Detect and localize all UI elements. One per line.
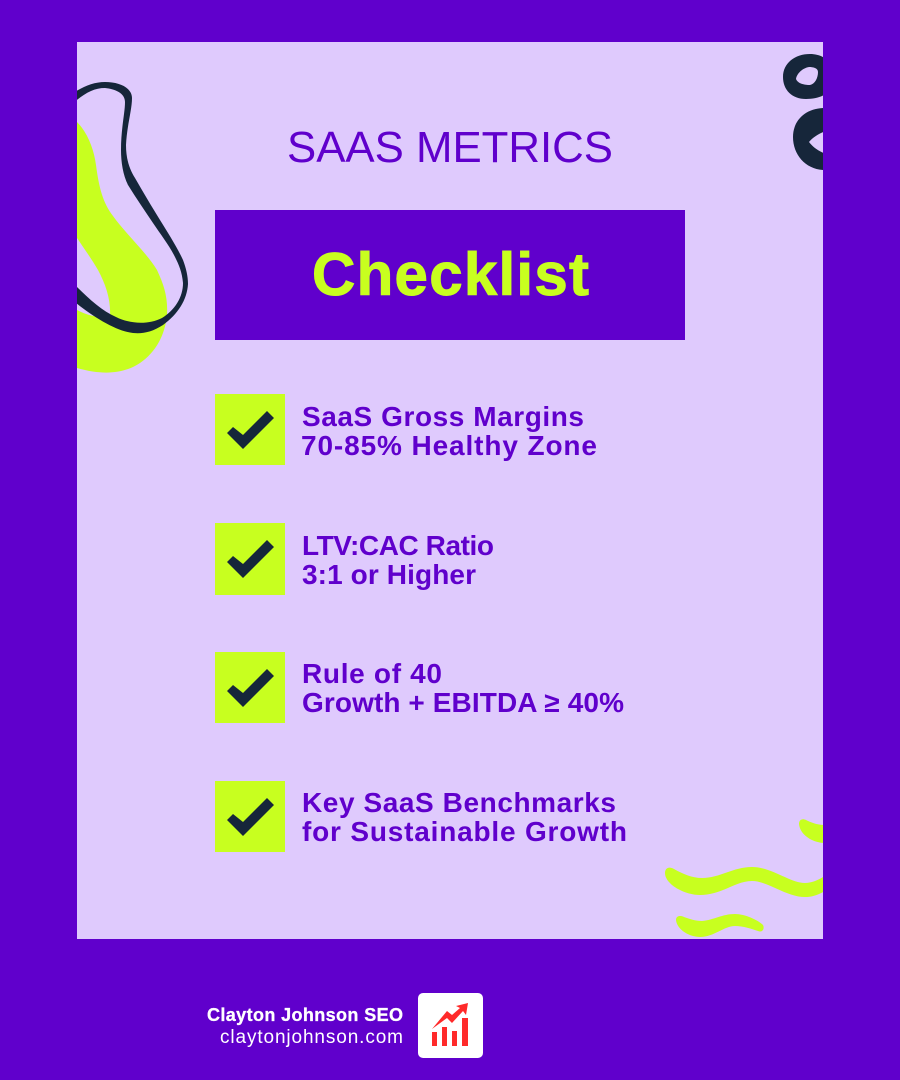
item text: [301, 401, 597, 461]
item text: [302, 787, 627, 847]
item text: 3:1 or Higher: [302, 559, 476, 590]
icon: footer logo with growth chart: [418, 993, 483, 1058]
icon: checkbox: [215, 652, 285, 723]
item text: Rule of 40: [302, 658, 442, 689]
icon: checkbox: [215, 523, 285, 595]
item text: SaaS Gross Margins: [302, 401, 584, 432]
checklist item: LTV:CAC: [215, 523, 494, 595]
icon: checkbox: [215, 781, 285, 852]
item text: LTV:CAC Ratio: [302, 530, 494, 561]
heading banner: Checklist: Checklist: [312, 241, 589, 308]
item text: Key SaaS Benchmarks: [302, 787, 616, 818]
title: SAAS METRICS: SAAS METRICS: [287, 123, 613, 172]
decoration: top-right rings: [783, 54, 823, 170]
item text: 70-85% Healthy Zone: [301, 430, 597, 461]
checklist item: benchmarks: [215, 781, 627, 852]
panel: checklist card: [77, 42, 823, 939]
heading banner: Checklist: [215, 210, 685, 340]
item text: for Sustainable Growth: [302, 816, 627, 847]
item text: [302, 658, 624, 718]
item text: Growth + EBITDA ≥ 40%: [302, 687, 624, 718]
decoration: bottom-right squiggles: [665, 819, 825, 937]
footer brand text: claytonjohnson.com: [220, 1027, 403, 1048]
icon: checkbox: [215, 394, 285, 465]
checklist item: gross margins: [215, 394, 597, 465]
footer brand text: [207, 1005, 403, 1048]
decoration: top-left blob and outline: [70, 82, 188, 373]
checklist item: rule of 40: [215, 652, 624, 723]
footer brand text: Clayton Johnson SEO: [207, 1005, 403, 1025]
item text: [302, 530, 494, 590]
